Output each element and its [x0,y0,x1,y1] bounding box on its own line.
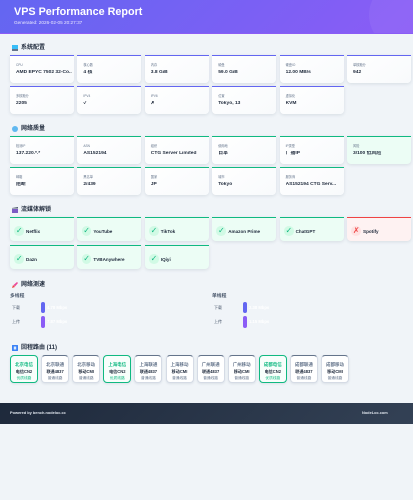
card: blacklist: 2/439 [83,182,96,186]
card: hosting: 邮箱 [16,174,22,178]
route: Shanghai Telecom: 电信CN2 [109,369,125,374]
card: IP: 检测IP [16,144,25,148]
card: disk IO: 硬盘IO [286,62,295,66]
route: Chengdu Telecom: 成都电信 [264,362,282,366]
route: Beijing Unicom: 北京联通 [46,362,64,366]
generated timestamp: Generated: 2026-02-05 20:27:37 [14,20,82,24]
card: virtualization: KVM [286,100,296,106]
route: Guangzhou Mobile: 移动CMI [234,369,250,374]
item: Dazn: Dazn [26,257,37,262]
label: single upload: 上传 [214,319,222,324]
route: Guangzhou Unicom: 广州联通 [202,362,220,366]
card: IPv6: IPV6 [151,94,158,98]
route: Beijing Unicom: 联通4837 [46,369,64,374]
card: memory [145,55,209,83]
card: disk IO: 12.00 MB/s [286,70,311,74]
panel: speed test [10,292,269,328]
section heading: system config [12,43,45,51]
route: Chengdu Unicom: 普通线路 [297,376,311,380]
item: TikTok: ✓ [151,226,157,235]
route: Shanghai Unicom: 联通4837 [140,369,157,374]
card: blacklist: 黑名单 [83,174,93,178]
card: single core score [347,55,411,83]
card: country [145,167,209,195]
card: virtualization: 虚拟化 [286,94,295,98]
card: CPU: AMD EPYC 7502 32-Co... [16,70,72,74]
section heading: streaming unlock [12,205,51,213]
card: IPv4 [77,86,141,114]
label: single download: 下载 [214,304,222,310]
card: location [212,86,276,114]
item: Netflix: ✓ [16,226,23,235]
route: Beijing Telecom: 优质线路 [17,376,31,380]
item: Spotify: Spotify [363,229,379,234]
item: TikTok: TikTok [161,229,175,234]
item: iQiyi [145,245,209,269]
item: Spotify: ✗ [353,226,360,235]
route: Chengdu Unicom: 联通4837 [295,369,313,374]
card: IPv6 [145,86,209,114]
card: city: Tokyo [218,182,232,186]
panel: streaming unlock [9,217,412,271]
card: provider: 服务商 [286,174,295,178]
bar: single upload [243,316,247,328]
item: ChatGPT [280,217,344,241]
card: country: JP [151,182,157,186]
card: hosting: 阻断 [16,182,26,186]
card: usage location: 日本 [218,150,228,156]
value: multi upload: 7.87 Mbps [47,319,67,324]
route: Chengdu Mobile [321,355,349,383]
label: multi-thread: 多线程 [10,294,24,298]
route: Shanghai Mobile [166,355,194,383]
card: multi core score: 2205 [16,100,27,106]
card: organization: 组织 [151,144,157,148]
card: city: 城市 [218,174,225,178]
route: Guangzhou Mobile [228,355,256,383]
route: Shanghai Mobile: 普通线路 [172,376,187,380]
card: single core score: 单核跑分 [353,62,366,66]
item: TVBAnywhere [77,245,141,269]
card: city [212,167,276,195]
item: Netflix [10,217,74,241]
item: Dazn: ✓ [16,254,23,263]
item: YouTube: YouTube [93,229,112,234]
route: Shanghai Unicom: 普通线路 [141,376,156,380]
route: Beijing Telecom [10,355,38,383]
route: Guangzhou Unicom [197,355,225,383]
route: Shanghai Unicom: 上海联通 [139,362,157,366]
card: IP [10,136,74,164]
value: multi download: 4.78 Mbps [47,304,67,310]
card: risk [347,136,411,164]
card: IP type: IP类型 [286,144,295,148]
card: location: 位置 [218,94,225,98]
card: provider: AS152194 CTG Serv... [286,182,336,186]
item: Amazon Prime [212,217,276,241]
footer right text: NodeLoc.com [362,410,388,415]
card: cores: 核心数 [83,62,93,66]
card: IPv4: IPV4 [83,94,90,98]
card: disk IO [280,55,344,83]
item: ChatGPT: ✓ [285,226,292,235]
card: location: Tokyo, 13 [218,100,240,106]
card: IP type [280,136,344,164]
route: Shanghai Mobile: 上海移动 [170,362,188,366]
card: IP: 137.220.*.* [16,150,40,156]
route: Chengdu Telecom: 优质线路 [265,376,280,380]
route: Guangzhou Unicom: 普通线路 [203,376,218,380]
card: country: 国家 [151,174,157,178]
route: Beijing Mobile: 普通线路 [79,376,94,380]
route: Shanghai Mobile: 移动CMI [172,369,187,374]
card: hosting [10,167,74,195]
card: organization: CTG Server Limited [151,150,196,156]
card: cores [77,55,141,83]
card: disk: 59.0 GiB [218,70,238,74]
card: multi core score: 多核跑分 [16,94,29,98]
card: ASN [77,136,141,164]
card: provider [280,167,344,195]
item: TVBAnywhere: TVBAnywhere [93,257,125,262]
card: disk: 硬盘 [218,62,225,66]
card: memory: 3.8 GiB [151,70,168,74]
route: Chengdu Unicom: 成都联通 [295,362,313,366]
route: Chengdu Mobile: 移动CMI [327,369,343,374]
card: ASN: ASN [83,144,90,148]
route: Beijing Mobile [72,355,100,383]
item: Amazon Prime: ✓ [218,226,225,235]
decorative circle [369,0,413,50]
card: IPv4: ✓ [83,100,87,106]
item: iQiyi: IQiyi [161,257,171,262]
section heading: speed test: 网络测速 [21,282,45,288]
value: single download: 2.38 Mbps [249,304,269,310]
card: multi core score [10,86,74,114]
item: Netflix: Netflix [26,229,40,234]
item: ChatGPT: ChatGPT [296,229,315,234]
route: Shanghai Telecom [103,355,131,383]
footer [0,403,413,424]
route: Chengdu Telecom [259,355,287,383]
route: Beijing Mobile: 北京移动 [77,362,95,366]
item: YouTube [77,217,141,241]
route: Chengdu Telecom: 电信CN2 [265,369,281,374]
card: CPU [10,55,74,83]
card: memory: 内存 [151,62,157,66]
card: CPU: CPU [16,62,23,66]
card: organization [145,136,209,164]
route: Beijing Telecom: 电信CN2 [16,369,32,374]
card: ASN: AS152194 [83,150,107,156]
route: Guangzhou Unicom: 联通4837 [202,369,219,374]
route: Beijing Unicom [41,355,69,383]
route: Chengdu Unicom [290,355,318,383]
card: disk [212,55,276,83]
route: Beijing Mobile: 移动CMI [78,369,94,374]
card: risk: 风险 [353,144,359,148]
panel: system config [9,55,412,116]
section heading: return routes: 回程路由 (11) [21,345,57,351]
value: single upload: 1.15 Mbps [249,319,269,324]
bar: single download [243,302,247,313]
card: single core score: 942 [353,70,361,74]
card: IP type: 广播IP [286,150,300,156]
route: Chengdu Mobile: 成都移动 [326,362,344,366]
section heading: return routes [12,344,57,351]
card: usage location: 使用地 [218,144,228,148]
card: virtualization [280,86,344,114]
panel: return routes [10,355,350,384]
route: Beijing Unicom: 普通线路 [48,376,62,380]
route: Guangzhou Mobile: 广州移动 [233,362,251,366]
route: Shanghai Unicom [134,355,162,383]
item: Amazon Prime: Amazon Prime [228,229,260,234]
title: VPS Performance Report [14,6,142,18]
item: TikTok [145,217,209,241]
section heading: network quality [12,124,45,132]
header banner [0,0,413,34]
item: Spotify [347,217,411,241]
section heading: streaming unlock: 流媒体解锁 [21,207,51,213]
card: risk: 3/100 低风险 [353,150,381,156]
route: Shanghai Telecom: 上海电信 [108,362,126,366]
route: Chengdu Mobile: 普通线路 [328,376,342,380]
item: TVBAnywhere: ✓ [83,254,90,263]
bar: multi upload [41,316,45,328]
section heading: speed test [12,280,45,288]
footer left text: Powered by bench.nodeloc.cc [10,410,66,415]
label: single-thread: 单线程 [212,294,226,298]
section heading: system config: 系统配置 [21,45,45,51]
card: usage location [212,136,276,164]
label: multi download: 下载 [12,304,20,310]
item: Dazn [10,245,74,269]
route: Guangzhou Mobile: 普通线路 [234,376,249,380]
label: multi upload: 上传 [12,319,20,324]
panel: network quality [9,136,412,197]
route: Shanghai Telecom: 优质线路 [110,376,125,380]
item: YouTube: ✓ [83,226,90,235]
bar: multi download [41,302,45,313]
item: iQiyi: ✓ [151,254,157,263]
section heading: network quality: 网络质量 [21,126,45,132]
card: IPv6: ✗ [151,100,155,106]
card: cores: 4 核 [83,70,92,74]
card: blacklist [77,167,141,195]
route: Beijing Telecom: 北京电信 [15,362,33,366]
